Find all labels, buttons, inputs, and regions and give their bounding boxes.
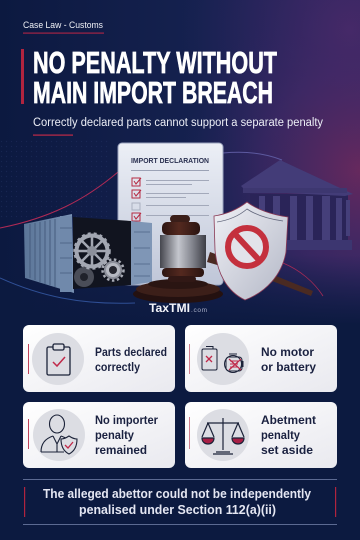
icon: scales of justice bbox=[202, 418, 244, 454]
panel: no motor or battery: or battery bbox=[261, 360, 316, 374]
panel: no importer penalty remained: No importer bbox=[95, 413, 158, 427]
panel: parts declared correctly bbox=[23, 325, 175, 392]
logo: TaxTMI.com: TaxTMI bbox=[149, 303, 190, 315]
panel: no importer penalty remained: remained bbox=[95, 443, 147, 457]
callout: conclusion bbox=[23, 479, 337, 525]
icon: small gear bbox=[102, 260, 124, 280]
icon: large gear bbox=[74, 234, 110, 268]
illustration: shield with prohibition sign bbox=[214, 202, 288, 300]
logo: TaxTMI.com bbox=[149, 303, 207, 315]
panel: abetment penalty set aside bbox=[185, 402, 337, 468]
icon: person with shield bbox=[41, 415, 77, 454]
callout: conclusion: The alleged abettor could not be independently bbox=[43, 487, 311, 501]
subtitle: Correctly declared parts cannot support a separate penalty bbox=[33, 117, 323, 129]
illustration: gavel bbox=[133, 215, 313, 303]
panel: parts declared correctly: correctly bbox=[95, 360, 140, 374]
panel: no motor or battery: No motor bbox=[261, 345, 314, 359]
panel: no importer penalty remained: penalty bbox=[95, 428, 134, 442]
icon: clipboard with check bbox=[47, 344, 70, 375]
illustration: courthouse bbox=[241, 160, 353, 250]
panel: parts declared correctly: Parts declared bbox=[95, 345, 167, 359]
logo: TaxTMI.com: .com bbox=[191, 307, 207, 314]
panel: abetment penalty set aside: set aside bbox=[261, 443, 313, 457]
illustration: shipping container with gears bbox=[24, 214, 152, 293]
panel: abetment penalty set aside: Abetment bbox=[261, 413, 316, 427]
panel: abetment penalty set aside: penalty bbox=[261, 428, 300, 442]
icon: battery crossed bbox=[202, 346, 217, 370]
illustration: import declaration document bbox=[118, 143, 223, 285]
icon: motor crossed bbox=[224, 354, 243, 372]
panel: no importer penalty remained bbox=[23, 402, 175, 468]
title bbox=[21, 45, 277, 110]
panel: no motor or battery bbox=[185, 325, 337, 392]
callout: conclusion: penalised under Section 112(a)(ii) bbox=[79, 503, 276, 517]
illustration: import declaration document: IMPORT DECLARATION bbox=[131, 156, 209, 165]
eyebrow: Case Law - Customs: Case Law - Customs bbox=[23, 20, 103, 30]
